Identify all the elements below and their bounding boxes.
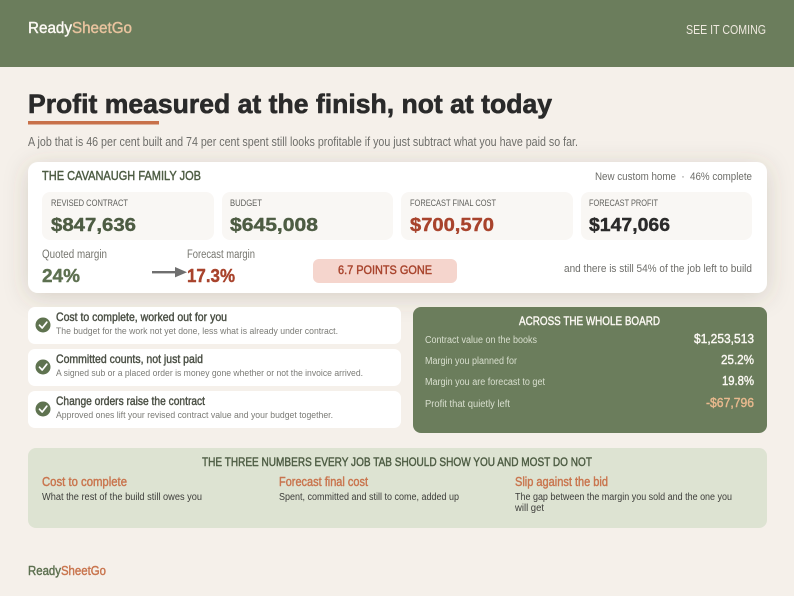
row: forecast margin — [425, 373, 754, 388]
panel: checklist — [28, 307, 401, 428]
stat: budget — [222, 192, 393, 240]
item: cost to complete — [28, 307, 401, 344]
stat: forecast profit: FORECAST PROFIT — [589, 198, 658, 208]
column: forecast final cost: Spent, committed and still to come, added up — [279, 492, 459, 503]
column: cost to complete: What the rest of the build still owes you — [42, 492, 202, 503]
item: committed counts — [28, 349, 401, 386]
quoted margin: Quoted margin — [42, 249, 107, 261]
row: planned margin: Margin you planned for — [425, 356, 518, 367]
row: profit lost: Profit that quietly left — [425, 399, 510, 410]
stat: revised contract — [42, 192, 214, 240]
column: slip against the bid — [514, 475, 732, 514]
quoted margin: 24% — [42, 265, 80, 286]
row: planned margin — [425, 352, 754, 367]
panel: job card — [28, 162, 767, 293]
footer logo: ReadySheetGo — [28, 563, 106, 578]
row: planned margin: 25.2% — [721, 352, 754, 367]
item: cost to complete: The budget for the work not yet done, less what is already under contract. — [56, 326, 338, 337]
column: slip against the bid: The gap between the margin you sold and the one you — [515, 492, 732, 503]
quoted margin — [42, 249, 107, 286]
row: contract value: $1,253,513 — [694, 331, 754, 346]
stat: forecast profit: $147,066 — [589, 214, 670, 235]
job card heading: THE CAVANAUGH FAMILY JOB — [42, 169, 201, 183]
column: cost to complete: Cost to complete — [42, 475, 127, 489]
column: forecast final cost: Forecast final cost — [279, 475, 368, 489]
column: forecast final cost — [279, 475, 459, 503]
column: cost to complete — [42, 475, 202, 503]
remaining job note: and there is still 54% of the job left to build — [564, 263, 752, 275]
row: forecast margin: Margin you are forecast to get — [425, 377, 545, 388]
header logo: ReadySheetGo — [28, 20, 132, 37]
panel: three numbers — [28, 448, 767, 528]
job descriptor: New custom home · 46% complete — [595, 171, 752, 183]
row: profit lost: -$67,796 — [706, 395, 754, 410]
forecast margin — [187, 249, 255, 286]
title underline — [28, 121, 159, 124]
stat: budget: $645,008 — [230, 214, 318, 235]
stat: forecast profit — [581, 192, 752, 240]
row: contract value — [425, 331, 754, 346]
stat: revised contract: $847,636 — [51, 214, 136, 235]
stat: revised contract: REVISED CONTRACT — [51, 198, 128, 208]
panel: across the whole board — [413, 307, 767, 433]
row: forecast margin: 19.8% — [722, 373, 754, 388]
row: contract value: Contract value on the books — [425, 335, 537, 346]
item: change orders — [28, 391, 401, 428]
header band — [0, 0, 794, 67]
row: profit lost — [425, 395, 754, 410]
forecast margin: 17.3% — [187, 265, 235, 286]
stat: budget: BUDGET — [230, 198, 262, 208]
callout: points gone — [313, 259, 457, 283]
stat: forecast final cost: $700,570 — [410, 214, 494, 235]
arrow: quoted to forecast margin — [152, 267, 187, 277]
title: Profit measured at the finish, not at today — [28, 89, 552, 119]
column: slip against the bid: Slip against the bid — [515, 475, 608, 489]
three numbers heading: THE THREE NUMBERS EVERY JOB TAB SHOULD SHOW YOU AND MOST DO NOT — [202, 455, 593, 469]
callout: points gone: 6.7 POINTS GONE — [338, 265, 432, 277]
header tagline: SEE IT COMING — [686, 23, 766, 37]
column: slip against the bid: will get — [514, 503, 544, 514]
subtitle: A job that is 46 per cent built and 74 per cent spent still looks profitable if you just subtract what you have paid so far. — [28, 135, 578, 149]
stat: forecast final cost: FORECAST FINAL COST — [410, 198, 496, 208]
stat: forecast final cost — [401, 192, 573, 240]
item: committed counts: A signed sub or a placed order is money gone whether or not the invoice arrived. — [56, 368, 363, 379]
forecast margin: Forecast margin — [187, 249, 255, 261]
item: cost to complete: Cost to complete, worked out for you — [56, 310, 227, 324]
item: change orders: Change orders raise the contract — [56, 394, 206, 408]
board heading: ACROSS THE WHOLE BOARD — [519, 314, 660, 328]
item: committed counts: Committed counts, not just paid — [56, 352, 203, 366]
item: change orders: Approved ones lift your revised contract value and your budget together. — [56, 410, 333, 421]
